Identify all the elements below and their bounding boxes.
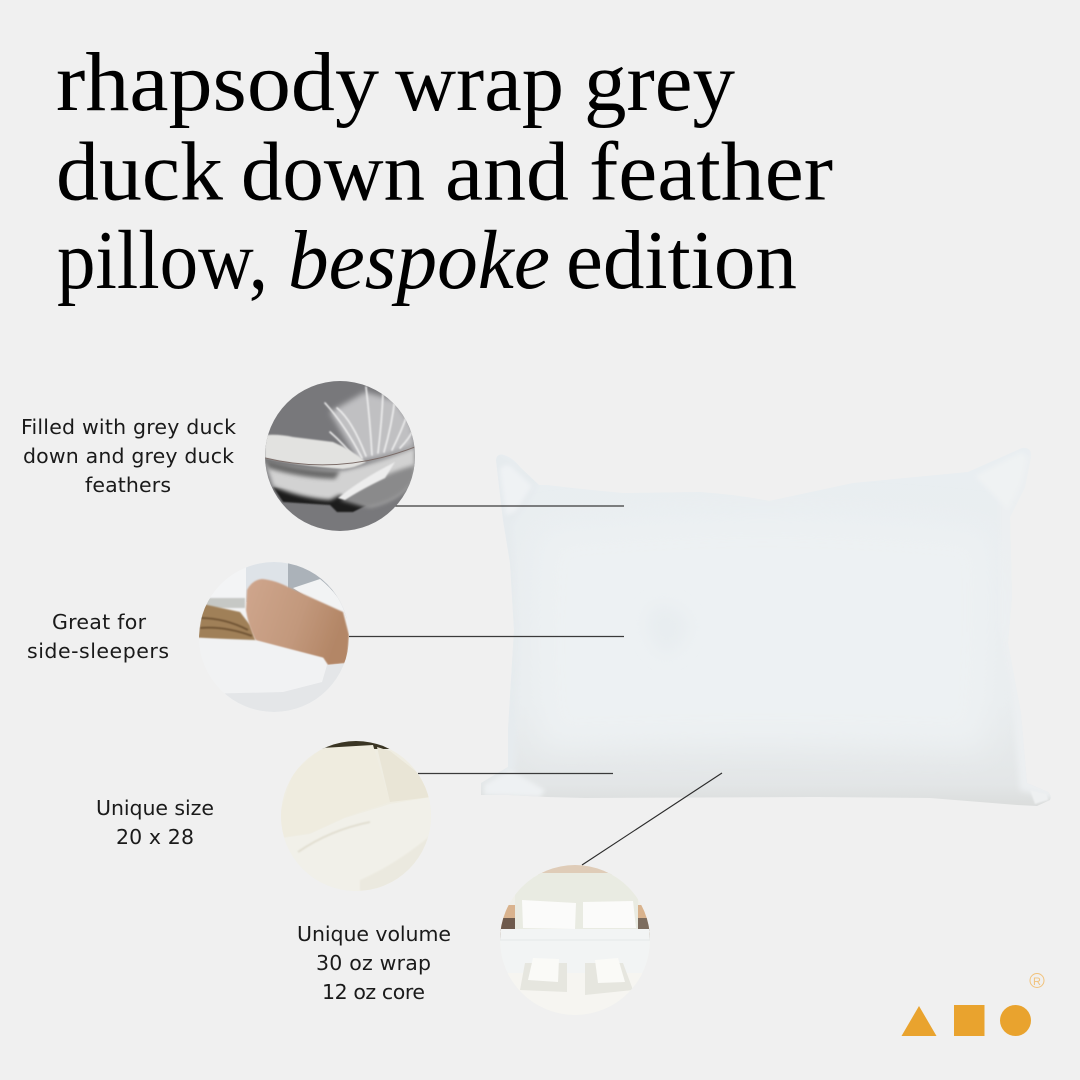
title: duck [56, 126, 223, 218]
fluff [325, 387, 415, 462]
photo circle: side sleeper [198, 562, 349, 712]
label: volume [297, 922, 451, 1004]
label: filling: Filled with grey duck [21, 415, 236, 439]
upper vane [265, 435, 366, 469]
title: and [445, 126, 569, 218]
label: volume: 12 oz core [322, 980, 425, 1004]
towels right [585, 963, 632, 995]
shadow [273, 487, 367, 512]
title: wrap [395, 36, 564, 129]
label: filling: feathers [85, 473, 171, 497]
label: side sleepers: side-sleepers [27, 639, 169, 663]
icon: triangle [902, 1006, 936, 1036]
title: feather [589, 126, 833, 218]
leader line: volume [582, 773, 722, 865]
label: size: 20 x 28 [116, 825, 194, 849]
label: volume: 30 oz wrap [316, 951, 431, 975]
label: filling [21, 415, 236, 497]
label: size [96, 796, 214, 849]
title [56, 36, 833, 307]
title: bespoke [288, 214, 550, 307]
title: down [241, 126, 425, 218]
label: size: Unique size [96, 796, 214, 820]
pillow photo [470, 440, 1060, 810]
title: edition [566, 214, 797, 307]
leader line: size [418, 772, 613, 774]
photo circle: bed linen [280, 741, 431, 891]
hair [198, 604, 256, 642]
label: volume: Unique volume [297, 922, 451, 946]
registered mark [1030, 974, 1044, 988]
leader line: side sleepers [349, 636, 624, 638]
photo circle: hotel room [500, 865, 650, 995]
icon: circle [1000, 1005, 1031, 1036]
photo circle: feather [265, 381, 415, 531]
logo [902, 974, 1044, 1036]
title: grey [584, 36, 735, 129]
label: side sleepers [27, 610, 169, 663]
towels left [520, 963, 567, 992]
icon: square [954, 1005, 984, 1036]
lower vane [265, 447, 415, 506]
title: rhapsody [56, 36, 379, 129]
title: pillow, [57, 214, 268, 307]
label: filling: down and grey duck [23, 444, 234, 468]
leader line: filling [393, 505, 624, 507]
registered mark: R [1033, 976, 1041, 988]
label: side sleepers: Great for [52, 610, 147, 634]
